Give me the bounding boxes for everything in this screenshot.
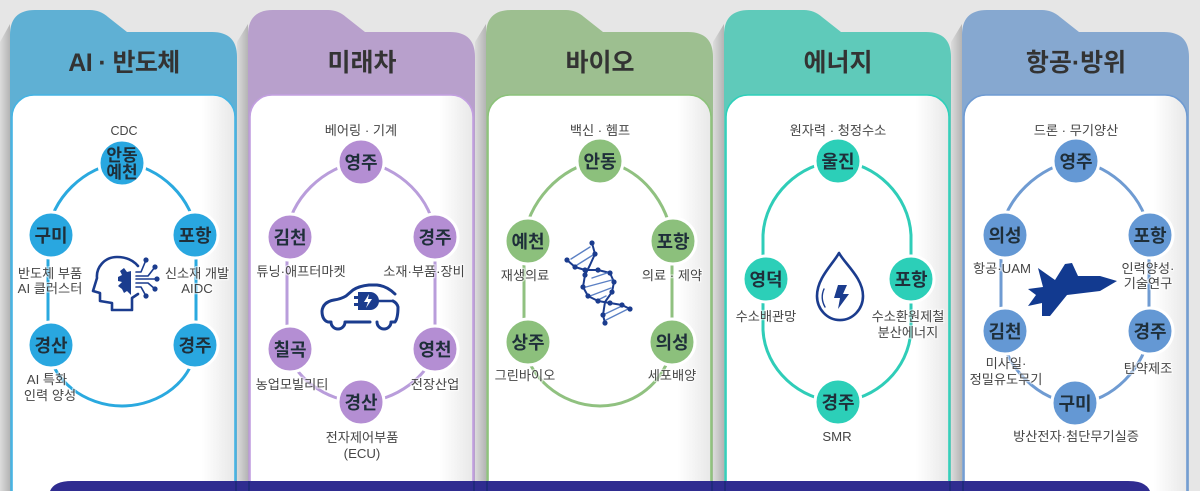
ring diagram: 경주 [418, 228, 452, 248]
labels: 드론 · 무기양산 [1034, 123, 1118, 138]
labels [736, 123, 944, 444]
ring diagram: 경주 [178, 336, 212, 356]
labels: 베어링 · 기계 [325, 123, 397, 138]
ring diagram: 경주 [821, 393, 855, 413]
labels: 농업모빌리티 [256, 377, 328, 392]
icon: AI head with gear [93, 257, 160, 310]
icon: fighter jet [1028, 263, 1117, 316]
labels: 튜닝·애프터마켓 [256, 264, 346, 279]
labels: AIDC [181, 281, 213, 296]
labels: 인력 양성 [24, 388, 76, 403]
ring diagram [743, 138, 934, 425]
labels: 백신 · 헴프 [570, 123, 630, 138]
labels: 수소환원제철 [872, 309, 944, 324]
heading: AI · 반도체 [68, 49, 180, 77]
ring diagram: 안동 [106, 146, 138, 165]
labels [256, 123, 465, 461]
labels: 반도체 부품 [18, 266, 82, 281]
ring diagram: 포항 [656, 232, 690, 252]
labels: 신소재 개발 [165, 266, 229, 281]
ring diagram: 영덕 [749, 270, 783, 290]
ring diagram: 영천 [418, 340, 452, 360]
icon: energy drop [817, 253, 863, 320]
labels: AI 클러스터 [18, 281, 82, 296]
labels: 의료 · 제약 [642, 268, 702, 283]
ring diagram: 경주 [1133, 322, 1167, 342]
panel: future cars [237, 10, 475, 491]
labels: (ECU) [344, 446, 380, 461]
labels: 기술연구 [1124, 276, 1172, 291]
labels [970, 123, 1174, 444]
labels [495, 123, 702, 383]
ring diagram: 울진 [821, 152, 855, 172]
labels: 수소배관망 [736, 309, 796, 324]
ring diagram: 안동 [583, 152, 617, 172]
ring diagram: 구미 [34, 226, 68, 246]
ring diagram [267, 139, 458, 425]
labels: 전장산업 [411, 377, 459, 392]
labels: 전자제어부품 [326, 430, 398, 445]
labels: 인력양성· [1122, 261, 1174, 276]
labels: 미사일· [986, 356, 1026, 371]
labels: 소재·부품·장비 [383, 264, 465, 279]
panel: energy [713, 10, 951, 491]
ring diagram [982, 138, 1173, 426]
ring diagram: 포항 [894, 270, 928, 290]
ring diagram: 칠곡 [273, 340, 307, 360]
labels: AI 특화 [27, 372, 67, 387]
ring diagram: 영주 [1059, 152, 1093, 172]
ring diagram: 김천 [273, 228, 307, 248]
ring diagram: 김천 [988, 322, 1022, 342]
ring diagram: 의성 [988, 226, 1022, 246]
labels: 원자력 · 청정수소 [790, 123, 886, 138]
icon: DNA helix [564, 240, 633, 326]
bottom banner [50, 481, 1150, 491]
ring diagram: 예천 [106, 163, 138, 182]
heading: 미래차 [327, 49, 397, 77]
labels: 탄약제조 [1124, 361, 1172, 376]
labels: 재생의료 [501, 268, 549, 283]
heading: 에너지 [803, 49, 873, 77]
labels: 정밀유도무기 [970, 372, 1042, 387]
ring diagram: 구미 [1058, 394, 1092, 414]
ring diagram: 상주 [511, 333, 545, 353]
labels: 세포배양 [648, 368, 696, 383]
ring diagram [505, 138, 696, 406]
ring diagram: 포항 [178, 226, 212, 246]
labels: 방산전자·첨단무기실증 [1013, 429, 1139, 444]
ring diagram: 의성 [655, 333, 689, 353]
labels: 항공·UAM [973, 261, 1031, 276]
ring diagram [28, 140, 218, 406]
labels [18, 124, 229, 403]
ring diagram: 영주 [344, 153, 378, 173]
panel: bio [475, 10, 713, 491]
heading: 바이오 [565, 49, 635, 77]
ring diagram: 경산 [34, 336, 68, 356]
ring diagram: 예천 [511, 232, 545, 252]
labels: SMR [822, 429, 852, 444]
ring diagram: 포항 [1133, 226, 1167, 246]
labels: 분산에너지 [878, 325, 938, 340]
ring diagram: 경산 [344, 393, 378, 413]
heading: 항공·방위 [1026, 49, 1126, 77]
icon: electric car [322, 285, 398, 329]
labels: 그린바이오 [495, 368, 555, 383]
labels: CDC [110, 124, 138, 138]
panel: AI semiconductor [0, 10, 237, 491]
panel: aerospace defense [951, 10, 1189, 491]
